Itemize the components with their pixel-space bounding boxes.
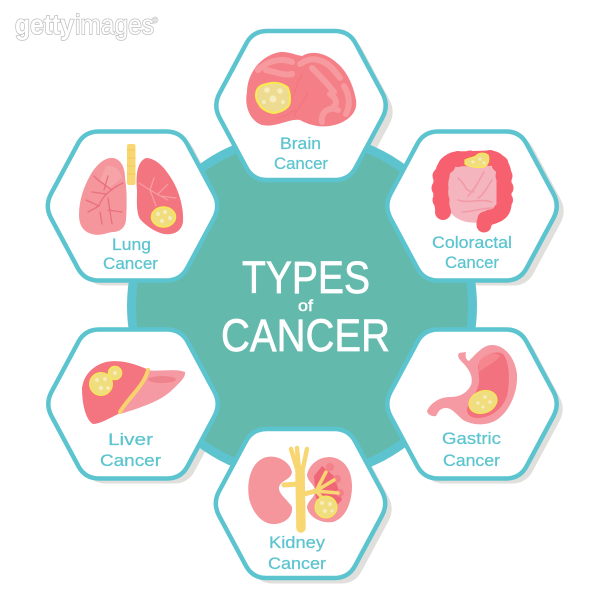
icon: colon with tumor (432, 150, 514, 230)
label: Gastric Cancer: Gastric (442, 429, 502, 448)
panel: lung cancer (48, 132, 217, 280)
watermark: gettyimages: getty (15, 9, 74, 40)
title (221, 252, 390, 361)
label: Lung Cancer (103, 235, 158, 273)
title: CANCER (221, 310, 390, 361)
tumor (256, 83, 290, 113)
panel: brain cancer (216, 31, 386, 180)
scalloped colon edge (432, 150, 514, 230)
panel: liver cancer (48, 330, 218, 478)
central circle (127, 131, 477, 481)
trachea (127, 144, 136, 185)
label: Kidney Cancer (268, 533, 326, 573)
label: Lung Cancer: Lung (112, 235, 151, 254)
icon: liver with tumors (82, 361, 185, 424)
icon: stomach with tumor (427, 345, 517, 424)
icon: kidneys with tumor (248, 448, 352, 528)
watermark: gettyimages: ® (152, 16, 158, 25)
tumor (465, 386, 501, 418)
watermark: gettyimages (15, 9, 158, 40)
panel: colorectal cancer (387, 132, 557, 280)
label: Gastric Cancer: Cancer (443, 451, 500, 470)
panel: gastric cancer (387, 330, 557, 478)
label: Liver Cancer: Cancer (100, 451, 161, 470)
tumors (90, 366, 122, 396)
label: Coloractal Cancer: Coloractal (432, 233, 512, 252)
label: Brain Cancer (274, 134, 328, 173)
title: TYPES (242, 252, 370, 303)
label: Brain Cancer: Brain (280, 134, 321, 153)
ureter and vessels (284, 448, 338, 528)
hexagon shadows (54, 38, 564, 584)
tumor (315, 496, 337, 518)
label: Coloractal Cancer (432, 233, 512, 272)
label: Brain Cancer: Cancer (274, 154, 328, 173)
icon: brain with tumor (246, 52, 356, 126)
label: Kidney Cancer: Cancer (268, 554, 326, 573)
title: of (298, 298, 314, 315)
label: Gastric Cancer (442, 429, 502, 470)
tumor (465, 153, 489, 167)
tumor (152, 207, 176, 227)
panel: kidney cancer (216, 429, 385, 578)
label: Coloractal Cancer: Cancer (445, 253, 499, 272)
icon: lungs with tumor (79, 144, 183, 235)
label: Lung Cancer: Cancer (103, 254, 158, 273)
label: Liver Cancer (100, 430, 161, 470)
label: Kidney Cancer: Kidney (269, 533, 326, 552)
watermark: gettyimages: images (75, 9, 154, 40)
label: Liver Cancer: Liver (108, 430, 153, 449)
